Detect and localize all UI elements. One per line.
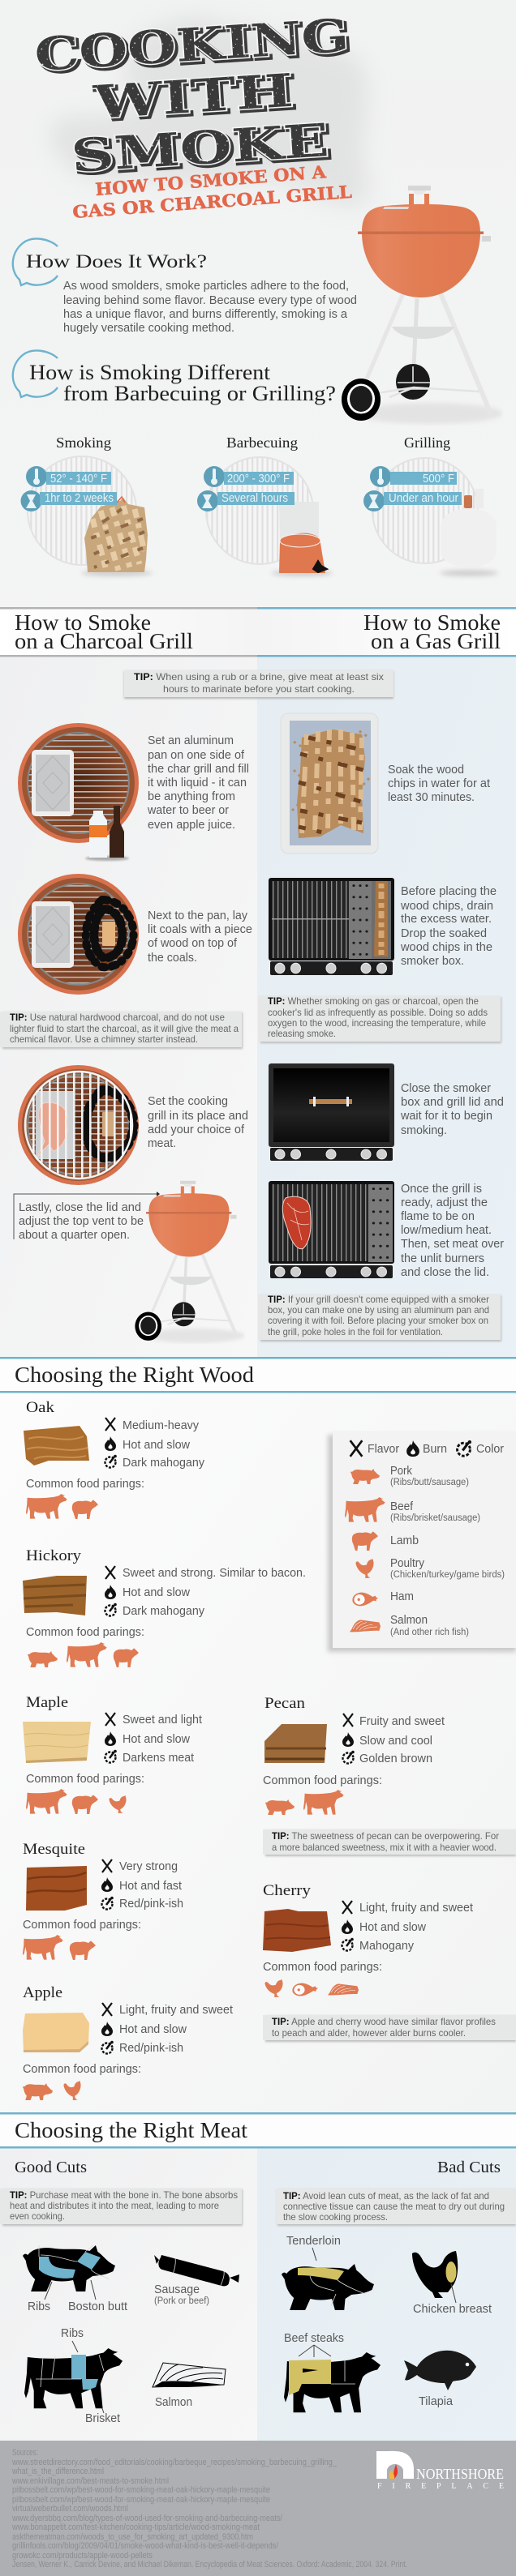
wood: oak: Medium-heavy xyxy=(123,1419,200,1432)
gas step 4: meat on grill: the unlit burners xyxy=(401,1252,484,1265)
subtitle xyxy=(72,161,353,222)
gas step 1: soak chips: least 30 minutes. xyxy=(388,790,475,804)
tip: make a smoker box: covering it with foil. Before placing your smoker box on xyxy=(268,1315,488,1326)
wood: maple: Hot and slow xyxy=(123,1733,191,1746)
legend panel: (And other rich fish) xyxy=(390,1628,469,1637)
logo: northshore fireplace: FIREPLACE xyxy=(377,2482,504,2491)
bad cut: tilapia: Tilapia xyxy=(419,2395,454,2408)
good cut: pork ribs and boston butt: Ribs xyxy=(28,2300,50,2313)
comparison: smoking: 1hr to 2 weeks xyxy=(45,492,114,505)
comparison: smoking xyxy=(21,434,153,576)
section header: charcoal and gas: How to Smoke xyxy=(363,610,501,635)
wood: pecan: Golden brown xyxy=(359,1752,432,1765)
wood: maple: Darkens meat xyxy=(123,1752,194,1765)
gas step 4: meat on grill: low/medium heat. xyxy=(401,1223,492,1237)
large charcoal grill illustration xyxy=(342,186,503,424)
legend key: Color xyxy=(476,1443,504,1456)
gas step 3: close lid: Close the smoker xyxy=(401,1081,491,1095)
charcoal step 4: callout with grill: about a quarter open. xyxy=(19,1228,130,1242)
charcoal step 3: cooking grill and meat: grill in its place and xyxy=(148,1109,248,1123)
tip: meat with bone xyxy=(0,2189,243,2226)
wood: hickory: Hickory xyxy=(26,1547,82,1564)
body text: how does it work: leaving behind some flavor. Because every type of wood xyxy=(63,293,357,307)
section header: charcoal and gas: How to Smoke xyxy=(15,610,151,635)
wood: hickory: Dark mahogany xyxy=(123,1605,205,1618)
legend panel: Pork xyxy=(390,1465,413,1478)
good cut: pork ribs and boston butt: Boston butt xyxy=(68,2300,127,2313)
comparison: grilling: 500° F xyxy=(423,473,454,486)
wood: cherry: Cherry xyxy=(263,1882,312,1899)
tip: open lid infrequently: oxygen to the wood, increasing the temperature, while xyxy=(268,1017,486,1029)
panel backgrounds: good and bad cuts xyxy=(0,2147,516,2441)
title: COOKING xyxy=(36,11,353,84)
wood: pecan xyxy=(263,1695,445,1815)
wood: apple xyxy=(23,1984,233,2100)
bad cut: chicken breast xyxy=(412,2251,492,2316)
legend panel: Ham xyxy=(390,1590,414,1603)
title: WITH xyxy=(94,66,298,132)
tip: meat with bone: even cooking. xyxy=(10,2210,65,2222)
legend key xyxy=(350,1440,504,1457)
gas step 3: close lid xyxy=(269,1063,504,1161)
gas step 2: smoker box: Drop the soaked xyxy=(401,926,487,940)
charcoal step 2: coals and wood xyxy=(18,874,252,995)
gas step 1: soak chips xyxy=(281,713,491,854)
wood: oak: Hot and slow xyxy=(123,1439,191,1452)
tip: marinate xyxy=(124,670,393,699)
wood: cherry: Hot and slow xyxy=(359,1921,427,1934)
gas step 3: close lid: smoking. xyxy=(401,1123,447,1137)
panel backgrounds: charcoal and gas xyxy=(0,657,516,1358)
gas step 3: close lid: box and grill lid and xyxy=(401,1095,504,1109)
good cut: beef ribs and brisket: Brisket xyxy=(85,2412,120,2425)
section header: charcoal and gas: on a Gas Grill xyxy=(371,629,501,653)
legend panel: Poultry xyxy=(390,1557,425,1570)
tip: avoid lean cuts: connective tissue can cause the meat to dry out during xyxy=(283,2201,505,2212)
wood section background xyxy=(0,1392,516,2113)
sources list: growokc.com/products/apple-wood-pellets xyxy=(12,2551,153,2561)
wood: apple: Common food parings: xyxy=(23,2063,141,2076)
legend panel: Lamb xyxy=(390,1534,419,1547)
wood: pecan: Fruity and sweet xyxy=(359,1715,445,1728)
tip: make a smoker box: the grill, poke holes in the foil for ventilation. xyxy=(268,1326,443,1337)
good cut: pork ribs and boston butt xyxy=(23,2245,127,2313)
tip: pecan xyxy=(263,1829,516,1856)
charcoal step 1: pan, liquid: even apple juice. xyxy=(148,818,235,832)
section header: choosing the right meat: Choosing the Right Meat xyxy=(15,2118,248,2142)
tip: avoid lean cuts xyxy=(275,2189,516,2226)
gas step 2: smoker box: wood chips, drain xyxy=(400,899,493,913)
speech bubble icon: how does it work xyxy=(13,238,58,285)
tip: apple and cherry: to peach and alder, however alder burns cooler. xyxy=(272,2027,466,2039)
tip: meat with bone: TIP: Purchase meat with the bone in. The bone absorbs xyxy=(10,2189,238,2201)
tip: avoid lean cuts: the slow cooking process. xyxy=(283,2211,388,2223)
section header: charcoal and gas xyxy=(0,607,516,657)
comparison: grilling: Grilling xyxy=(404,434,450,451)
sources list: grillinfools.com/blog/2009/04/01/smoke-wood-what-kind-is-best-well-it-depends/ xyxy=(12,2541,279,2551)
good cut: sausage: Sausage xyxy=(154,2283,200,2296)
gas step 2: smoker box: smoker box. xyxy=(401,954,464,968)
comparison: barbecuing: Barbecuing xyxy=(226,434,298,451)
tip: open lid infrequently: releasing smoke. xyxy=(268,1028,336,1039)
smoke behind title xyxy=(49,16,369,206)
charcoal step 1: pan, liquid: Set an aluminum xyxy=(148,734,234,747)
good cut: salmon xyxy=(153,2363,226,2409)
wood: apple: Hot and slow xyxy=(119,2023,187,2036)
heading: how does it work: How Does It Work? xyxy=(26,251,207,272)
tip: marinate: TIP: When using a rub or a brine, give meat at least six xyxy=(134,671,384,683)
tip: make a smoker box: TIP: If your grill doesn't come equipped with a smoker xyxy=(268,1294,489,1305)
wood: maple: Sweet and light xyxy=(123,1714,202,1727)
tip: apple and cherry xyxy=(263,2015,516,2042)
gas step 2: smoker box: wood chips in the xyxy=(400,940,492,954)
section header: choosing the right meat xyxy=(0,2112,516,2148)
tip: natural charcoal: chemical flavor. Use a chimney starter instead. xyxy=(10,1033,198,1045)
charcoal step 1: pan, liquid: water to beer or xyxy=(147,803,229,817)
tip: natural charcoal: lighter fluid to start the charcoal, as it will give the meat a xyxy=(10,1023,239,1034)
logo: northshore fireplace xyxy=(376,2451,504,2491)
wood: maple: Common food parings: xyxy=(26,1773,144,1786)
speech bubble icon: how is smoking different xyxy=(13,350,58,397)
charcoal step 1: pan, liquid: pan on one side of xyxy=(148,748,245,762)
bad cut: tilapia xyxy=(404,2351,476,2408)
wood: pecan: Pecan xyxy=(264,1695,306,1712)
subtitle: GAS OR CHARCOAL GRILL xyxy=(72,182,353,222)
tip: avoid lean cuts: TIP: Avoid lean cuts of meat, as the lack of fat and xyxy=(283,2190,489,2202)
wood: maple xyxy=(23,1694,202,1814)
legend key: Burn xyxy=(423,1443,447,1456)
tip: open lid infrequently: cooker's lid as infrequently as possible. Doing so adds xyxy=(268,1007,488,1018)
wood: mesquite: Mesquite xyxy=(23,1841,85,1858)
wood: cherry: Common food parings: xyxy=(263,1961,382,1974)
legend panel: (Ribs/butt/sausage) xyxy=(390,1478,469,1487)
gas step 4: meat on grill xyxy=(269,1181,504,1279)
title: SMOKE xyxy=(70,113,330,183)
sources list: askthemeatman.com/woods_to_use_for_smoking_art_updated_9300.htm xyxy=(12,2532,253,2542)
heading: how is smoking different xyxy=(29,361,336,405)
wood: mesquite xyxy=(23,1841,183,1960)
tip: natural charcoal xyxy=(0,1012,243,1049)
wood: cherry xyxy=(263,1882,473,1997)
body text: how does it work: As wood smolders, smoke particles adhere to the food, xyxy=(63,279,349,293)
heading: how is smoking different: How is Smoking Different xyxy=(29,361,271,384)
wood: apple: Red/pink-ish xyxy=(119,2042,183,2055)
bad cut: beef steaks xyxy=(284,2332,381,2412)
wood: cherry: Light, fruity and sweet xyxy=(359,1902,473,1915)
section header: choosing the right wood: Choosing the Right Wood xyxy=(15,1363,255,1387)
tip: open lid infrequently: TIP: Whether smoking on gas or charcoal, open the xyxy=(268,995,479,1007)
tip: apple and cherry: TIP: Apple and cherry wood have similar flavor profiles xyxy=(272,2016,496,2027)
legend key: Flavor xyxy=(368,1443,399,1456)
good cut: sausage: (Pork or beef) xyxy=(154,2296,209,2306)
wood: mesquite: Hot and fast xyxy=(119,1880,182,1893)
heading: how is smoking different: from Barbecuing or Grilling? xyxy=(63,382,336,405)
bad cut: chicken breast: Chicken breast xyxy=(413,2303,492,2316)
charcoal step 3: cooking grill and meat: add your choice of xyxy=(148,1123,245,1136)
sources list: www.streetdirectory.com/food_editorials/cooking/barbeque_recipes/smoking_barbecuing_grilling_ xyxy=(11,2458,338,2467)
comparison: smoking: 52° - 140° F xyxy=(50,473,107,486)
wood: oak: Dark mahogany xyxy=(123,1457,205,1470)
charcoal step 3: cooking grill and meat: meat. xyxy=(148,1136,176,1150)
tip: pecan: TIP: The sweetness of pecan can be overpowering. For xyxy=(272,1830,499,1842)
title: SMOKE xyxy=(72,116,333,186)
tip: meat with bone: heat and distributes it into the meat, leading to more xyxy=(10,2200,219,2211)
charcoal step 2: coals and wood: the coals. xyxy=(148,951,197,965)
gas step 4: meat on grill: flame to be on xyxy=(401,1209,475,1223)
charcoal step 1: pan, liquid: be anything from xyxy=(148,789,235,803)
legend panel: (Chicken/turkey/game birds) xyxy=(390,1570,505,1580)
section header: choosing the right wood xyxy=(0,1357,516,1393)
gas step 4: meat on grill: ready, adjust the xyxy=(401,1196,488,1209)
sources list: what_is_the_difference.html xyxy=(11,2467,104,2476)
charcoal step 1: pan, liquid: it with liquid - it can xyxy=(148,776,247,789)
wood: mesquite: Very strong xyxy=(119,1860,178,1873)
wood: hickory: Hot and slow xyxy=(123,1586,191,1599)
body text: how does it work: hugely versatile cooking method. xyxy=(63,321,234,335)
wood: apple: Light, fruity and sweet xyxy=(119,2004,233,2017)
wood: mesquite: Common food parings: xyxy=(23,1919,141,1932)
bad cut: beef steaks: Beef steaks xyxy=(284,2332,344,2345)
charcoal step 4: callout with grill: Lastly, close the lid and xyxy=(19,1200,141,1214)
section header: charcoal and gas: on a Charcoal Grill xyxy=(15,629,193,653)
gas step 3: close lid: wait for it to begin xyxy=(400,1109,492,1123)
comparison: smoking: Smoking xyxy=(56,434,111,451)
charcoal step 4: callout with grill xyxy=(14,1181,245,1343)
wood: hickory xyxy=(23,1547,306,1667)
comparison: barbecuing: 200° - 300° F xyxy=(227,473,290,486)
title: WITH xyxy=(91,64,295,130)
sources list xyxy=(11,2448,407,2570)
gas step 1: soak chips: Soak the wood xyxy=(388,763,464,777)
sources list: pitbossbelt.com/wp/best-wood-for-smoking-meat-oak-hickory-maple-mesquite xyxy=(12,2495,270,2505)
wood: oak: Common food parings: xyxy=(26,1478,144,1491)
charcoal step 1: pan, liquid xyxy=(18,723,249,861)
logo: northshore fireplace: NORTHSHORE xyxy=(416,2466,504,2482)
good cut: beef ribs and brisket xyxy=(24,2327,123,2425)
legend panel: Beef xyxy=(390,1500,414,1513)
subtitle: HOW TO SMOKE ON A xyxy=(94,161,327,199)
body text: how does it work xyxy=(63,279,357,335)
comparison: barbecuing: Several hours xyxy=(221,492,288,505)
charcoal step 2: coals and wood: Next to the pan, lay xyxy=(148,909,247,922)
wood: cherry: Mahogany xyxy=(359,1940,415,1953)
charcoal step 4: callout with grill: adjust the top vent to be xyxy=(19,1214,144,1228)
wood: pecan: Common food parings: xyxy=(263,1774,382,1787)
gas step 4: meat on grill: and close the lid. xyxy=(401,1265,489,1279)
good cut: beef ribs and brisket: Ribs xyxy=(61,2327,84,2340)
heading: good cuts: Good Cuts xyxy=(15,2159,87,2176)
sources list: virtualweberbullet.com/woods.html xyxy=(12,2504,128,2514)
wood: pecan: Slow and cool xyxy=(359,1735,432,1748)
gas step 2: smoker box xyxy=(269,878,497,975)
tip: make a smoker box xyxy=(258,1294,501,1341)
footer band xyxy=(0,2441,516,2576)
body text: how does it work: has a unique flavor, and burns differently, smoking is a xyxy=(63,307,348,321)
sources list: www.enkivillage.com/best-meats-to-smoke.html xyxy=(11,2476,169,2486)
gas step 2: smoker box: the excess water. xyxy=(401,912,492,926)
title xyxy=(33,9,353,186)
sources list: Sources: xyxy=(12,2448,38,2458)
charcoal step 3: cooking grill and meat: Set the cooking xyxy=(148,1094,228,1108)
charcoal step 1: pan, liquid: the char grill and fill xyxy=(148,762,249,776)
comparison: barbecuing xyxy=(197,434,333,576)
wood: mesquite: Red/pink-ish xyxy=(119,1898,183,1911)
gas step 4: meat on grill: Then, set meat over xyxy=(401,1237,504,1251)
comparison: grilling xyxy=(363,434,498,576)
bad cut: pork tenderloin: Tenderloin xyxy=(286,2235,341,2248)
tip: make a smoker box: box, you can make one by using an aluminum pan and xyxy=(268,1304,489,1316)
tip: natural charcoal: TIP: Use natural hardwood charcoal, and do not use xyxy=(10,1012,225,1023)
good cut: sausage xyxy=(154,2255,239,2306)
sources list: pitbossbelt.com/wp/best-wood-for-smoking-meat-oak-hickory-maple-mesquite xyxy=(12,2485,270,2495)
charcoal step 3: cooking grill and meat xyxy=(18,1065,248,1185)
sources list: Jensen, Werner K., Carrick Devine, and Michael Dikeman. Encyclopedia of Meat Sciences. Oxford: Academic, 2004. 324. Print. xyxy=(12,2560,407,2570)
tip: pecan: a more balanced sweetness, mix it with a heavier wood. xyxy=(272,1842,497,1853)
wood: hickory: Sweet and strong. Similar to bacon. xyxy=(123,1567,306,1580)
charcoal step 2: coals and wood: of wood on top of xyxy=(148,936,238,950)
legend panel xyxy=(328,1431,516,1652)
wood: oak: Oak xyxy=(26,1399,55,1416)
charcoal step 2: coals and wood: lit coals with a piece xyxy=(148,922,252,936)
bad cut: pork tenderloin xyxy=(282,2235,374,2310)
heading: bad cuts: Bad Cuts xyxy=(437,2159,501,2176)
sources list: www.bonappetit.com/test-kitchen/cooking-tips/article/wood-smoking-meat xyxy=(11,2523,260,2532)
gas step 1: soak chips: chips in water for at xyxy=(388,777,491,790)
tip: marinate: hours to marinate before you start cooking. xyxy=(163,683,355,695)
comparison: grilling: Under an hour xyxy=(389,492,458,505)
wood: hickory: Common food parings: xyxy=(26,1626,144,1639)
legend panel: (Ribs/brisket/sausage) xyxy=(390,1513,480,1523)
wood: apple: Apple xyxy=(23,1984,62,2001)
gas step 4: meat on grill: Once the grill is xyxy=(401,1182,482,1196)
tip: open lid infrequently xyxy=(258,995,501,1043)
wood: oak xyxy=(24,1399,205,1519)
wood: maple: Maple xyxy=(26,1694,68,1711)
sources list: www.dyersbbq.com/blog/types-of-wood-used-for-smoking-and-barbecuing-meats/ xyxy=(11,2514,283,2523)
good cut: salmon: Salmon xyxy=(155,2396,192,2409)
legend panel: Salmon xyxy=(390,1614,428,1627)
title: COOKING xyxy=(33,9,350,82)
gas step 2: smoker box: Before placing the xyxy=(401,884,497,898)
